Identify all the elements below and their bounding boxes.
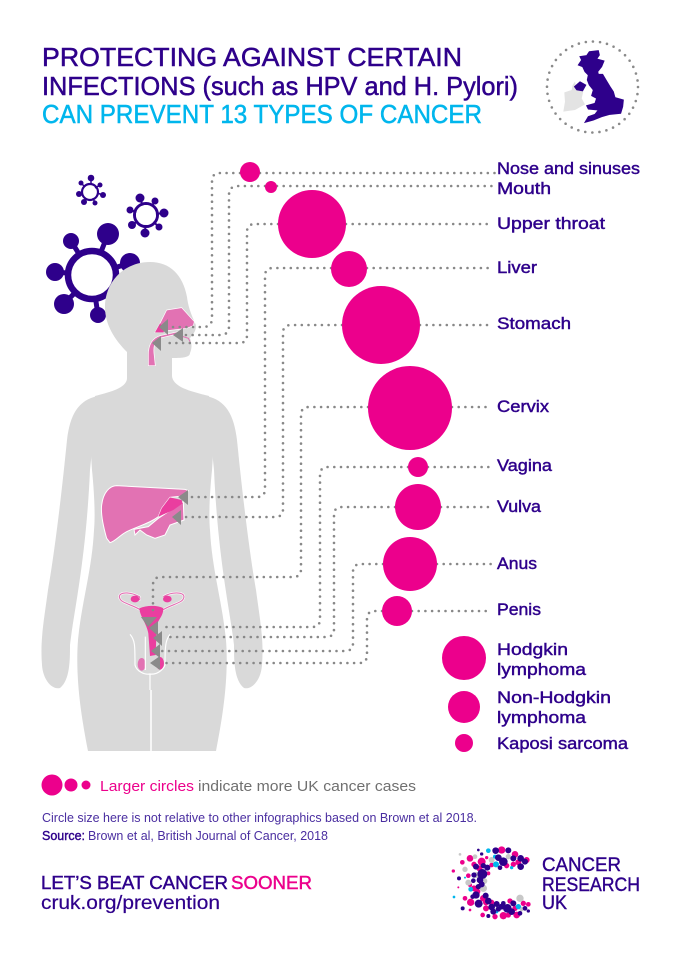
source note: Source: xyxy=(42,829,85,843)
source note xyxy=(42,811,477,843)
logo: Cancer Research UK: RESEARCH xyxy=(542,875,640,896)
title: INFECTIONS (such as HPV and H. Pylori) xyxy=(42,71,518,101)
legend xyxy=(42,774,416,796)
cancer type labels: Anus xyxy=(497,554,537,573)
title: CAN PREVENT 13 TYPES OF CANCER xyxy=(42,99,482,129)
cancer type labels: Stomach xyxy=(497,314,571,333)
cancer type labels: Liver xyxy=(497,258,537,277)
organs: nose, mouth and throat xyxy=(148,308,194,366)
title xyxy=(42,42,518,129)
cancer type labels: Upper throat xyxy=(497,214,605,233)
logo: Cancer Research UK: UK xyxy=(542,893,567,914)
dotted connector lines xyxy=(153,173,495,663)
icon: medium virus xyxy=(126,194,168,238)
organs: reproductive system xyxy=(119,593,184,690)
legend: indicate more UK cancer cases xyxy=(198,778,416,795)
cancer type labels: Penis xyxy=(497,600,541,619)
cancer type labels: Vagina xyxy=(497,456,553,475)
cancer size circles xyxy=(240,162,486,752)
call to action: SOONER xyxy=(231,872,312,893)
legend: Larger circles xyxy=(100,778,194,795)
logo: Cancer Research UK xyxy=(452,846,640,919)
body silhouette xyxy=(41,262,263,751)
arrowheads xyxy=(141,319,188,670)
call to action xyxy=(41,872,312,914)
cancer type labels xyxy=(497,159,640,753)
icon: large virus xyxy=(46,223,140,323)
logo: Cancer Research UK: CANCER xyxy=(542,855,621,876)
icon: UK and Ireland map xyxy=(547,42,638,132)
call to action: LET’S BEAT CANCER xyxy=(41,872,228,893)
source note: Brown et al, British Journal of Cancer, 2018 xyxy=(88,829,328,843)
cancer type labels: Mouth xyxy=(497,179,551,198)
source note: Circle size here is not relative to other infographics based on Brown et al 2018. xyxy=(42,811,477,825)
cancer type labels: Vulva xyxy=(497,497,542,516)
cancer type labels: Kaposi sarcoma xyxy=(497,734,629,753)
call to action: cruk.org/prevention xyxy=(41,893,220,914)
cancer type labels: lymphoma xyxy=(497,708,587,727)
cancer type labels: Hodgkin xyxy=(497,640,568,659)
cancer type labels: Cervix xyxy=(497,397,550,416)
icon: small virus xyxy=(76,175,106,206)
cancer type labels: Nose and sinuses xyxy=(497,159,640,178)
cancer type labels: lymphoma xyxy=(497,660,587,679)
title: PROTECTING AGAINST CERTAIN xyxy=(42,42,462,72)
cancer type labels: Non-Hodgkin xyxy=(497,688,611,707)
organs: liver and stomach xyxy=(101,486,188,543)
